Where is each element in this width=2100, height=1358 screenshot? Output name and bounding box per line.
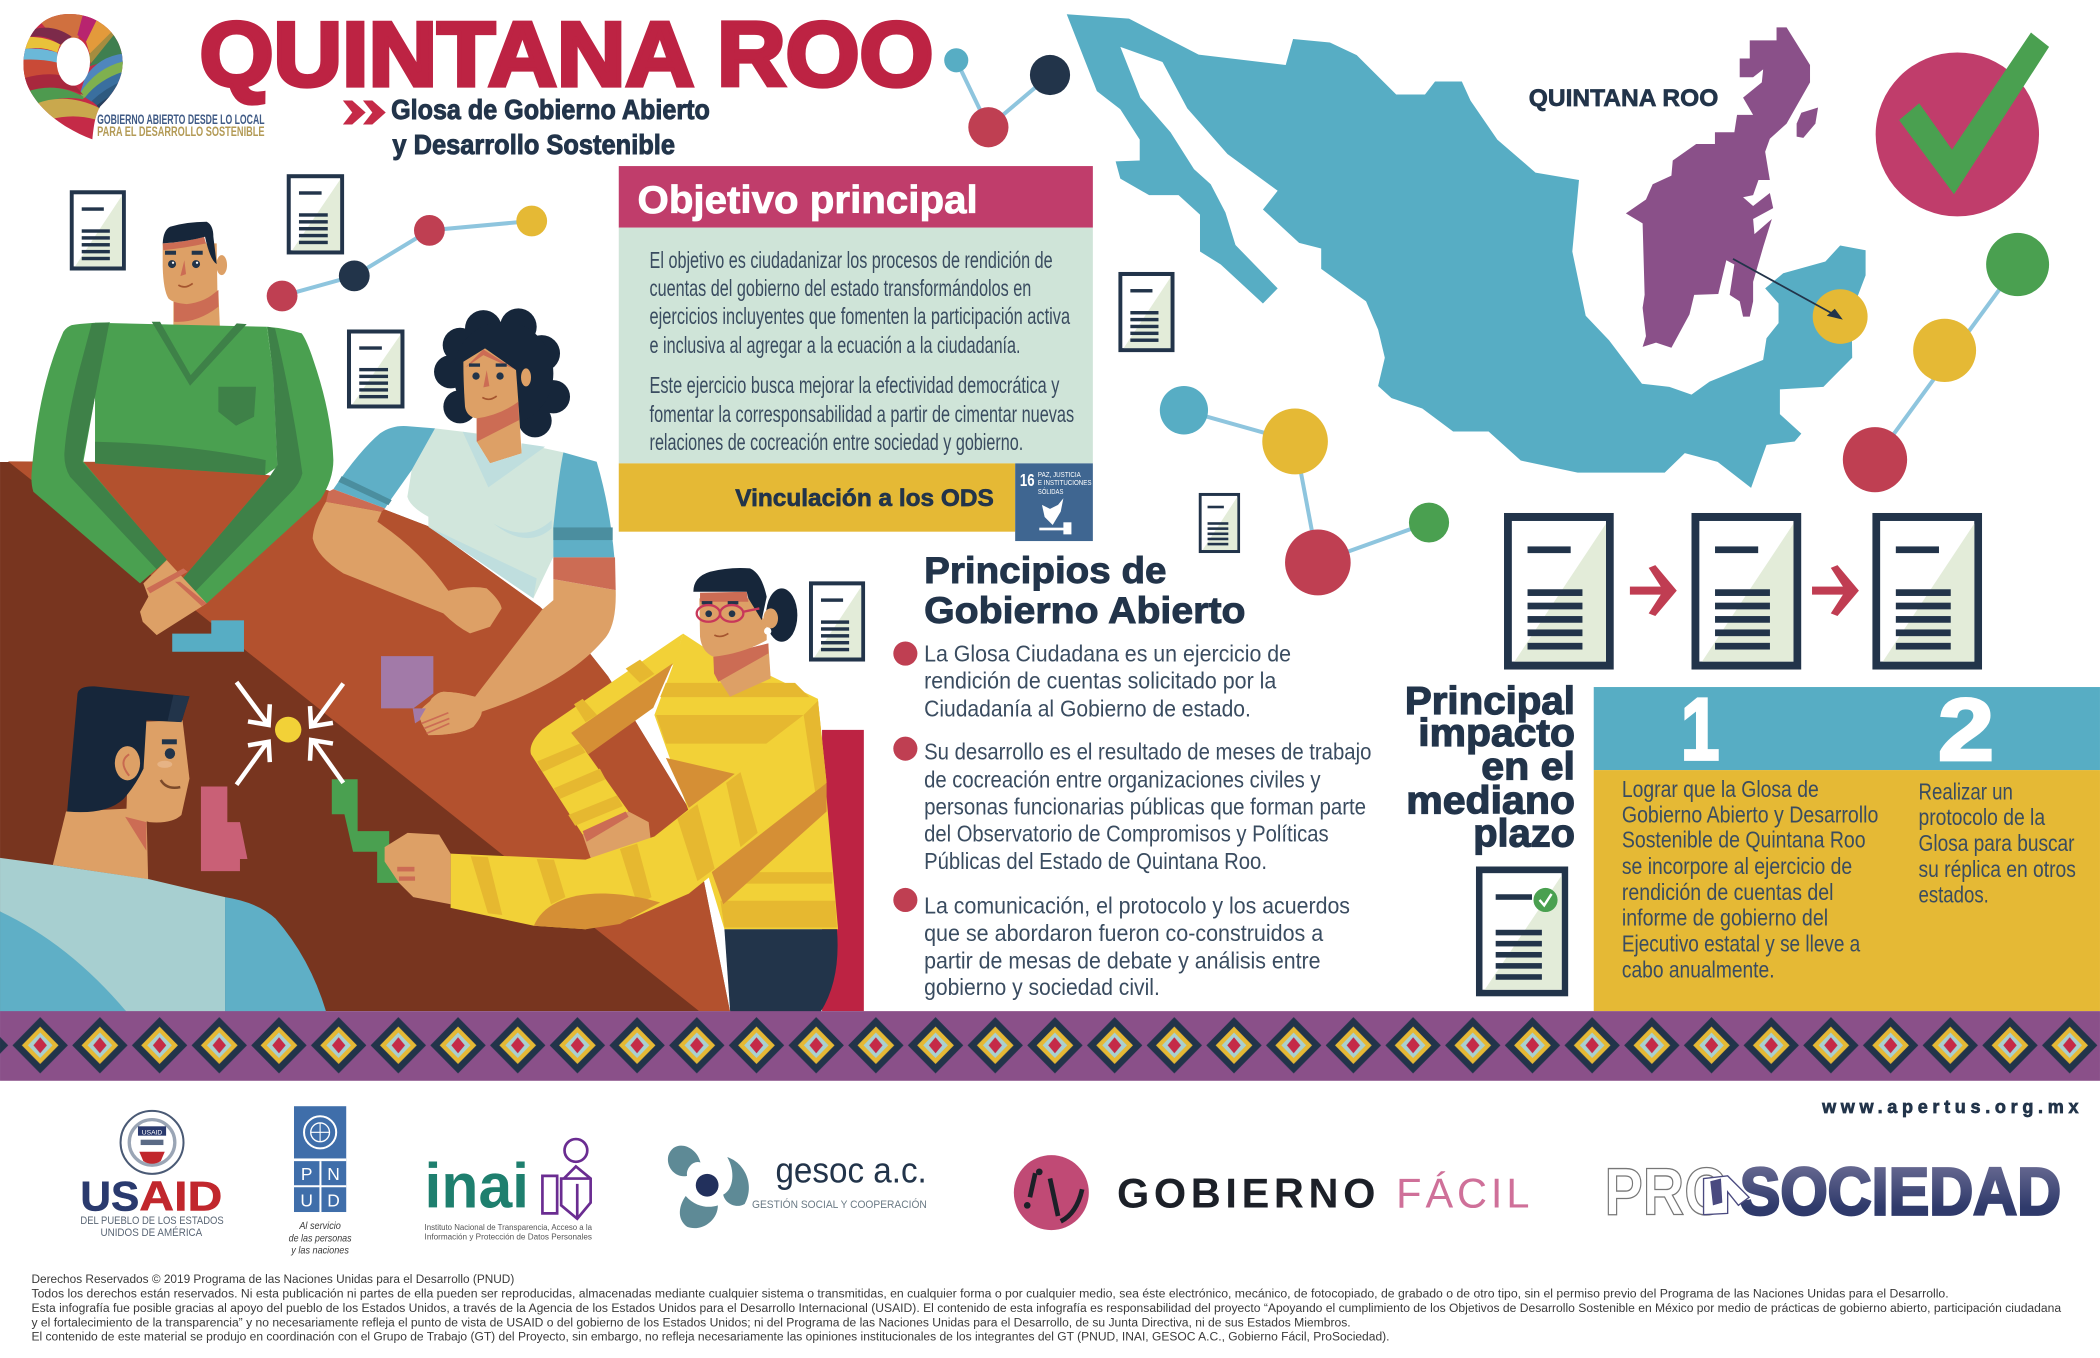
ODS 16 badge: SÓLIDAS (1038, 487, 1063, 496)
man: green torso (95, 323, 277, 475)
illustration: man in green (31, 222, 333, 635)
impact 1 text: rendición de cuentas del (1622, 879, 1833, 905)
impact 1 text: se incorpore al ejercicio de (1622, 853, 1852, 879)
impact 1 text: cabo anualmente. (1622, 957, 1775, 983)
logo: INAI: Instituto Nacional de Transparencia, Acceso a la (425, 1222, 592, 1232)
icon: check mark in circle (1876, 33, 2049, 216)
logo: Gobierno Fácil: FÁCIL (1396, 1169, 1529, 1216)
flow: three documents with arrows (1504, 513, 1982, 670)
logo text: PARA EL DESARROLLO SOSTENIBLE (97, 124, 265, 139)
woman: neck (713, 643, 771, 697)
logo: PNUD: N (327, 1164, 340, 1184)
impact 2 text: estados. (1919, 882, 1989, 908)
icon: document with check (1476, 866, 1568, 996)
heading: Principal impacto en el mediano plazo (1405, 680, 1575, 855)
flow document 1 (1504, 513, 1614, 670)
impact 2 text: protocolo de la (1919, 804, 2046, 830)
piece: blue (172, 620, 244, 652)
objective text: Este ejercicio busca mejorar la efectividad democrática y (650, 372, 1060, 398)
panel: objetivo principal (619, 166, 1093, 541)
heading: Principal impacto en el mediano plazo: mediano (1406, 780, 1575, 823)
illustration: woman in yellow (654, 634, 838, 1011)
man: face (163, 222, 227, 304)
man: hands (140, 560, 207, 635)
panel yellow body (1594, 770, 2100, 1011)
logo: ProSociedad: SOCIEDAD (1740, 1155, 2061, 1230)
website: www.apertus.org.mx (1821, 1097, 2079, 1117)
impact 2 text (1919, 779, 2076, 908)
logo: Gobierno Abierto desde lo local (23, 14, 264, 140)
number 1: 1 (1681, 679, 1720, 778)
logo: GESOC: GESTIÓN SOCIAL Y COOPERACIÓN (752, 1198, 927, 1211)
bullet 3: que se abordaron fueron co-construidos a (924, 920, 1324, 946)
man: neck (53, 808, 148, 879)
flow document 3 (1872, 513, 1982, 670)
logo: PNUD: D (327, 1191, 340, 1211)
heading: Principal impacto en el mediano plazo: Principal (1405, 680, 1575, 723)
network: centre (1160, 386, 1449, 595)
objective text: ejercicios incluyentes que fomenten la participación activa (650, 303, 1071, 329)
bullet 1: Ciudadanía al Gobierno de estado. (924, 695, 1251, 721)
logo: PNUD: U (300, 1191, 313, 1211)
woman: shirt (407, 428, 563, 598)
ODS 16 badge: E INSTITUCIONES (1038, 478, 1092, 487)
ODS 16 badge: 16 (1020, 470, 1035, 490)
logo: INAI (425, 1139, 593, 1241)
logo: PNUD: Al servicio (298, 1221, 341, 1232)
bullet 2: de cocreación entre organizaciones civiles y (924, 766, 1321, 792)
focal dot (275, 717, 301, 743)
decorative band: diamonds (0, 1011, 2100, 1081)
woman: left sleeve (333, 426, 435, 508)
illustration: table (0, 461, 730, 1011)
bullet 3: partir de mesas de debate y análisis entre (924, 947, 1321, 973)
bullet 2: personas funcionarias públicas que forman parte (924, 793, 1366, 819)
logo: USAID: UNIDOS DE AMÉRICA (100, 1226, 203, 1239)
illustration: woman in yellow arms (385, 634, 827, 929)
icon: document 5 (1199, 493, 1240, 553)
flow arrow 1 (1630, 565, 1677, 616)
woman: hair (434, 308, 570, 437)
bullet 1: La Glosa Ciudadana es un ejercicio de (924, 641, 1291, 667)
impact 1 text: Sostenible de Quintana Roo (1622, 827, 1866, 853)
impact 1 text: informe de gobierno del (1622, 904, 1828, 930)
illustration: puzzle pieces and focal point (172, 620, 399, 883)
icon: document 3 (347, 329, 404, 408)
logo: PNUD (289, 1106, 352, 1257)
flow arrow 2 (1812, 565, 1859, 616)
impact 2 text: Realizar un (1919, 779, 2013, 805)
flow document 2 (1692, 513, 1801, 670)
illustration: purple puzzle piece and hand (381, 656, 482, 735)
heading: Principal impacto en el mediano plazo: impacto (1418, 712, 1575, 755)
objective text: e inclusiva al agregar a la ecuación a la ciudadanía. (650, 332, 1021, 358)
icon: document 4 (1118, 272, 1175, 352)
logo: Gobierno Fácil (1014, 1155, 1529, 1230)
panel header (619, 166, 1093, 228)
map of Mexico (1067, 14, 1868, 488)
logo: PNUD: P (301, 1164, 313, 1184)
woman: neck (477, 402, 522, 463)
arrows converging (237, 682, 343, 785)
bullet 3: La comunicación, el protocolo y los acuerdos (924, 892, 1350, 918)
icon: document 2 (287, 174, 344, 254)
logo: Gobierno Fácil: GOBIERNO (1117, 1169, 1375, 1216)
illustration: woman in yellow head (693, 568, 797, 697)
woman: trousers (724, 929, 838, 1011)
illustration: man in blue (0, 686, 326, 1011)
icon: document 1 (70, 190, 126, 271)
logo: PNUD: de las personas (289, 1233, 352, 1244)
panel: red block behind woman (822, 730, 864, 1011)
bullet 1: rendición de cuentas solicitado por la (924, 667, 1277, 693)
bullet 2: del Observatorio de Compromisos y Políticas (924, 821, 1329, 847)
impact 1 text: Ejecutivo estatal y se lleve a (1622, 931, 1861, 957)
logo: USAID: US (80, 1173, 139, 1220)
man: face (126, 720, 189, 822)
heading: Principal impacto en el mediano plazo: en el (1481, 745, 1575, 788)
subtitle: y Desarrollo Sostenible (392, 129, 675, 160)
panel: impact numbers (1594, 679, 2100, 1011)
man: neck (173, 290, 220, 350)
woman: body (654, 634, 838, 929)
impact 1 text: Gobierno Abierto y Desarrollo (1622, 801, 1878, 827)
network: left (267, 206, 547, 311)
woman: arm on table (531, 634, 683, 835)
ODS 16 badge: PAZ, JUSTICIA (1038, 470, 1081, 479)
woman: right arm (418, 579, 616, 735)
woman: reaching arm (451, 701, 827, 929)
icon: document 6 (809, 581, 865, 662)
ODS band (619, 463, 1015, 532)
woman: face (463, 348, 531, 418)
bullet 3 (893, 888, 1350, 1000)
heading: Principal impacto en el mediano plazo: plazo (1473, 812, 1575, 855)
legal text: Derechos Reservados © 2019 Programa de las Naciones Unidas para el Desarrollo (PNUD) (32, 1273, 514, 1286)
logo: USAID: DEL PUEBLO DE LOS ESTADOS (80, 1215, 224, 1227)
objective text (650, 247, 1074, 455)
bullet 2 (893, 737, 1371, 874)
number 2: 2 (1938, 680, 1994, 779)
woman: left arm (313, 502, 502, 633)
bullet 1 (893, 641, 1291, 721)
subtitle: Glosa de Gobierno Abierto (391, 94, 710, 125)
bullet 3: gobierno y sociedad civil. (924, 974, 1160, 1000)
woman: face (693, 568, 778, 657)
woman: hair bun (766, 588, 797, 642)
impact 1 text (1622, 776, 1878, 983)
network: right (1843, 233, 2049, 492)
map: Quintana Roo state (1626, 27, 1818, 348)
illustration: woman in white (313, 308, 616, 735)
objective text: relaciones de cocreación entre sociedad y gobierno. (650, 429, 1023, 455)
man: right arm (180, 327, 333, 603)
panel blue band (1594, 687, 2100, 770)
man: left arm (31, 322, 167, 583)
legal text: El contenido de este material se produjo en coordinación con el Grupo de Trabajo (GT) del Proyecto, sin embargo, no refleja necesariamente las opiniones institucionales de los integrantes del GT (PNUD, INAI, GESOC A.C., Gobierno Fácil, ProSociedad). (32, 1331, 1390, 1344)
title: QUINTANA ROO (200, 5, 933, 106)
bullet 2: Su desarrollo es el resultado de meses de trabajo (924, 738, 1371, 764)
legal text: y el fortalecimiento de la transparencia” y no necesariamente refleja el punto de vista de USAID o del gobierno de los Estados Unidos; ni del Programa de las Naciones Unidas para el Desarrollo, de su Junta Directiva, ni de sus Estados Miembros. (32, 1317, 1351, 1330)
panel body (619, 228, 1093, 463)
logo text (97, 112, 265, 139)
legal text: Todos los derechos están reservados. Ni esta publicación ni partes de ella pueden ser reproducidas, almacenadas mediante cualquier sistema o transmitidas, en cualquier forma o por cualquier medio, sea éste electrónico, mecánico, de fotocopiado, de grabado o de otro tipo, sin el permiso previo del Programa de las Naciones Unidas para el Desarrollo. (32, 1288, 1949, 1301)
logo: PNUD: y las naciones (290, 1246, 349, 1257)
subtitle (343, 94, 710, 160)
man: hair (67, 686, 189, 812)
piece: pink (201, 786, 247, 871)
logo: USAID: AID (139, 1173, 222, 1220)
logo: GESOC: gesoc a.c. (775, 1150, 927, 1191)
impact 1 text: Lograr que la Glosa de (1622, 776, 1819, 802)
objective text: El objetivo es ciudadanizar los procesos de rendición de (650, 247, 1053, 273)
network: top centre (944, 48, 1070, 147)
map label: QUINTANA ROO (1529, 85, 1718, 112)
man: shirt (0, 858, 225, 1011)
map: location marker (1733, 259, 1868, 344)
bullet 2: Públicas del Estado de Quintana Roo. (924, 848, 1267, 874)
ODS label: Vinculación a los ODS (735, 485, 994, 512)
heading: Principios de Gobierno Abierto (924, 549, 1246, 631)
bullet list: principios (893, 641, 1371, 1000)
logo: ProSociedad (1604, 1155, 2061, 1230)
logo text: GOBIERNO ABIERTO DESDE LO LOCAL (97, 112, 265, 127)
logo: INAI: Información y Protección de Datos Personales (425, 1231, 593, 1241)
panel heading text: Objetivo principal (638, 179, 978, 222)
legal text: Esta infografía fue posible gracias al apoyo del pueblo de los Estados Unidos, a través de la Agencia de los Estados Unidos para el Desarrollo Internacional (USAID). El contenido de esta infografía es responsabilidad del proyecto “Apoyando el cumplimiento de los Objetivos de Desarrollo Sostenible en México por medio de prácticas de gobierno abierto, participación ciudadana (32, 1302, 2062, 1315)
ODS 16 badge (1015, 463, 1093, 541)
logo: USAID (80, 1111, 224, 1239)
objective text: fomentar la corresponsabilidad a partir de cimentar nuevas (650, 401, 1074, 427)
logo: INAI: inai (425, 1151, 529, 1221)
objective text: cuentas del gobierno del estado transformándolos en (650, 275, 1031, 301)
woman: right sleeve (553, 452, 614, 557)
piece: green (332, 779, 399, 883)
logo: GESOC (668, 1146, 927, 1228)
heading: Principios de Gobierno Abierto: Gobierno Abierto (924, 589, 1246, 631)
logo: ProSociedad: PRO (1604, 1155, 1729, 1230)
legal text (32, 1273, 2062, 1344)
heading: Principios de Gobierno Abierto: Principios de (924, 549, 1167, 591)
logo: USAID: USAID (142, 1129, 162, 1136)
